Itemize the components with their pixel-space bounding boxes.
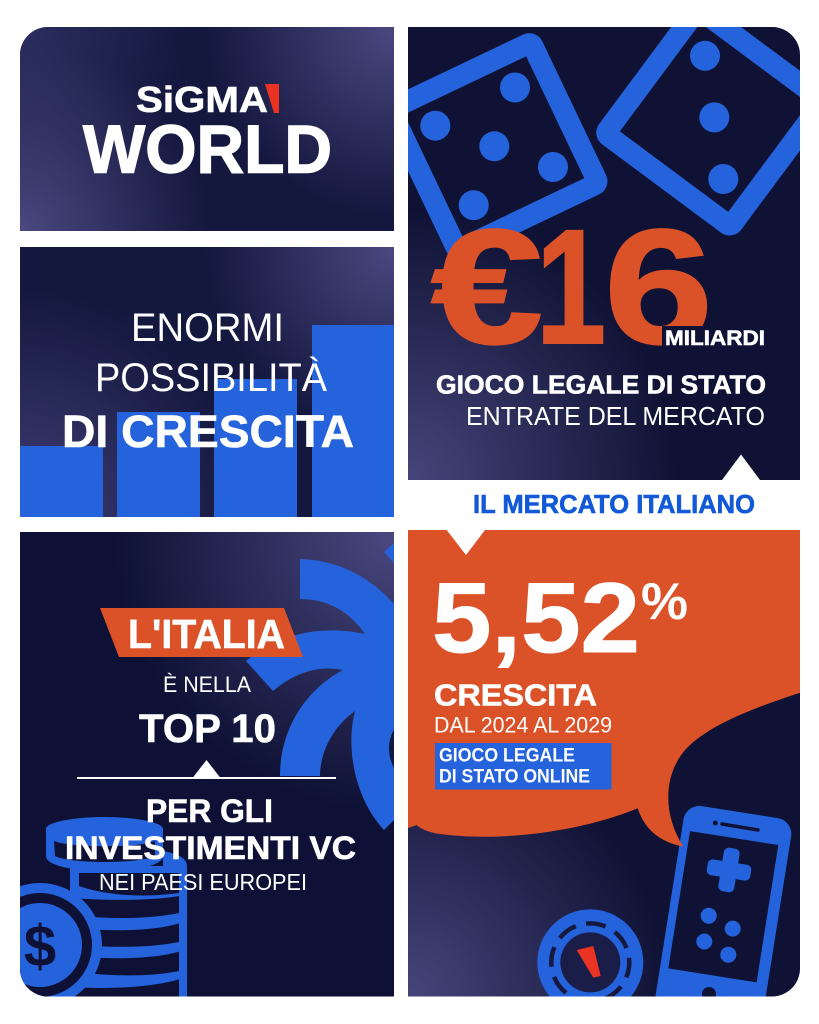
text: gioco legale di stato: GIOCO LEGALE DI STATO — [436, 370, 766, 400]
big number: 16 euro — [431, 195, 713, 378]
icon: poker chip — [537, 909, 644, 996]
text: entrate del mercato: ENTRATE DEL MERCATO — [466, 401, 765, 431]
text: per gli investimenti vc — [65, 793, 356, 895]
big number: 16 euro: 6 — [604, 195, 713, 378]
text: crescita: CRESCITA — [434, 678, 597, 712]
logo flag — [265, 84, 279, 113]
label: miliardi: MILIARDI — [665, 326, 765, 350]
label: gioco legale di stato online: GIOCO LEGALE — [439, 744, 575, 766]
panel: growth possibilities — [20, 247, 394, 517]
label: gioco legale di stato online: DI STATO ONLINE — [439, 766, 590, 788]
big number: 16 euro: 1 — [536, 195, 606, 378]
panel: 16 miliardi — [408, 27, 800, 480]
text: e nella: È NELLA — [163, 672, 251, 697]
bar chart — [20, 325, 394, 517]
panel: Italia top 10 — [0, 532, 395, 1007]
icon: dice five — [390, 42, 598, 250]
icon: dollar sign: $ — [24, 914, 56, 979]
big number: 16 euro: € — [431, 195, 543, 378]
heading: enormi possibilita di crescita: DI CRESCITA — [62, 406, 354, 457]
icon: dice three — [605, 8, 819, 227]
speech bubble — [408, 530, 800, 847]
tag: L'Italia: L'ITALIA — [128, 611, 285, 657]
heading: enormi possibilita di crescita: ENORMI — [131, 306, 284, 350]
heading: il mercato italiano: IL MERCATO ITALIANO — [473, 489, 755, 519]
percent sign: % — [641, 573, 688, 631]
logo word: SiGMA: SiGMA — [136, 79, 268, 120]
icon: coins stack — [20, 817, 187, 996]
panel: growth 5,52 percent — [408, 530, 800, 1024]
icon: palm tree — [246, 543, 395, 830]
heading: enormi possibilita di crescita — [62, 306, 354, 457]
icon: phone game controller — [655, 806, 792, 996]
logo word: WORLD: WORLD — [83, 112, 332, 188]
text: per gli investimenti vc: PER GLI — [146, 793, 273, 829]
pointer up — [722, 454, 760, 480]
text: per gli investimenti vc: NEI PAESI EUROPEI — [99, 869, 307, 895]
text: dal 2024 al 2029: DAL 2024 AL 2029 — [434, 712, 612, 738]
pointer down — [447, 530, 485, 555]
panel: SiGMA World logo — [20, 27, 394, 231]
label: gioco legale di stato online — [435, 743, 612, 790]
divider with pointer — [77, 760, 336, 779]
big number: 5,52: 5,52 — [432, 562, 640, 673]
heading: enormi possibilita di crescita: POSSIBILITÀ — [95, 355, 327, 400]
text: top 10: TOP 10 — [139, 707, 276, 751]
text: per gli investimenti vc: INVESTIMENTI VC — [65, 830, 356, 866]
